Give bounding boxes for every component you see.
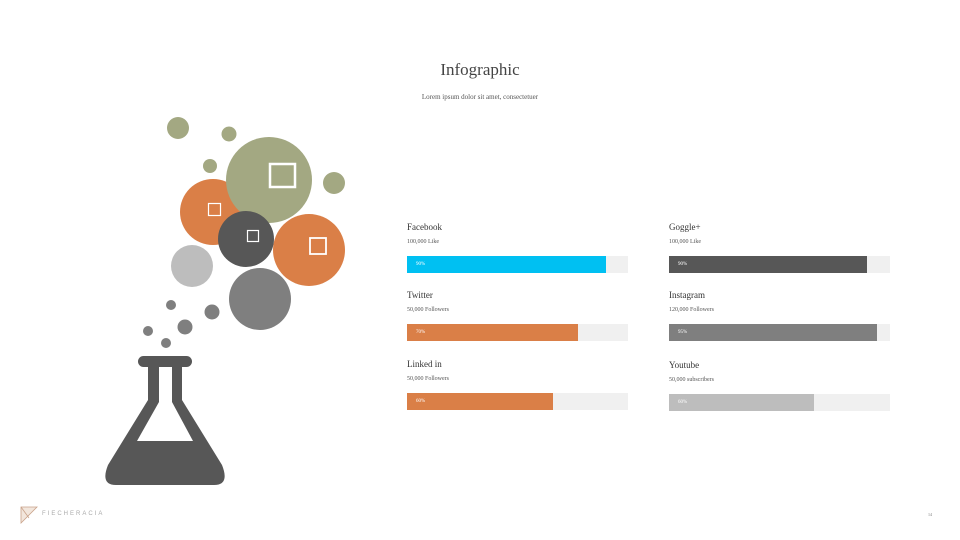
panel: Twitter <box>407 290 628 341</box>
panel: Twitter: Twitter <box>407 290 433 300</box>
panel: Youtube: 50,000 subscribers <box>669 377 714 383</box>
bubbles <box>143 117 345 348</box>
title: Infographic <box>440 60 520 79</box>
illustration: flask with bubbles <box>105 117 345 485</box>
panel: Twitter: 70% <box>416 330 425 335</box>
panel: Facebook: Facebook <box>407 222 442 232</box>
panel: Linked in: Linked in <box>407 359 442 369</box>
panel: Facebook <box>407 222 628 273</box>
panel: Youtube: 60% <box>678 400 687 405</box>
panel: Goggle+: 100,000 Like <box>669 239 701 245</box>
panel: Youtube <box>669 360 890 411</box>
panel: Facebook: 90% <box>416 262 425 267</box>
panel: Goggle+: Goggle+ <box>669 222 701 232</box>
panel: Goggle+: 90% <box>678 262 687 267</box>
panel: Instagram: 95% <box>678 330 687 335</box>
panel: Twitter: 50,000 Followers <box>407 307 449 313</box>
panel: Instagram <box>669 290 890 341</box>
logo: FIECHERACIA <box>42 511 104 517</box>
subtitle: Lorem ipsum dolor sit amet, consectetuer <box>422 93 538 101</box>
logo <box>20 506 104 524</box>
panel: Instagram: Instagram <box>669 290 705 300</box>
panel: Facebook: 100,000 Like <box>407 239 439 245</box>
panel: Linked in <box>407 359 628 410</box>
page number: 14 <box>928 512 932 517</box>
panel: Instagram: 120,000 Followers <box>669 307 714 313</box>
panel: Goggle+ <box>669 222 890 273</box>
panel: Linked in: 50,000 Followers <box>407 376 449 382</box>
panel: Youtube: Youtube <box>669 360 699 370</box>
icon squares <box>208 164 326 254</box>
panel: Linked in: 60% <box>416 399 425 404</box>
flask <box>105 356 225 485</box>
